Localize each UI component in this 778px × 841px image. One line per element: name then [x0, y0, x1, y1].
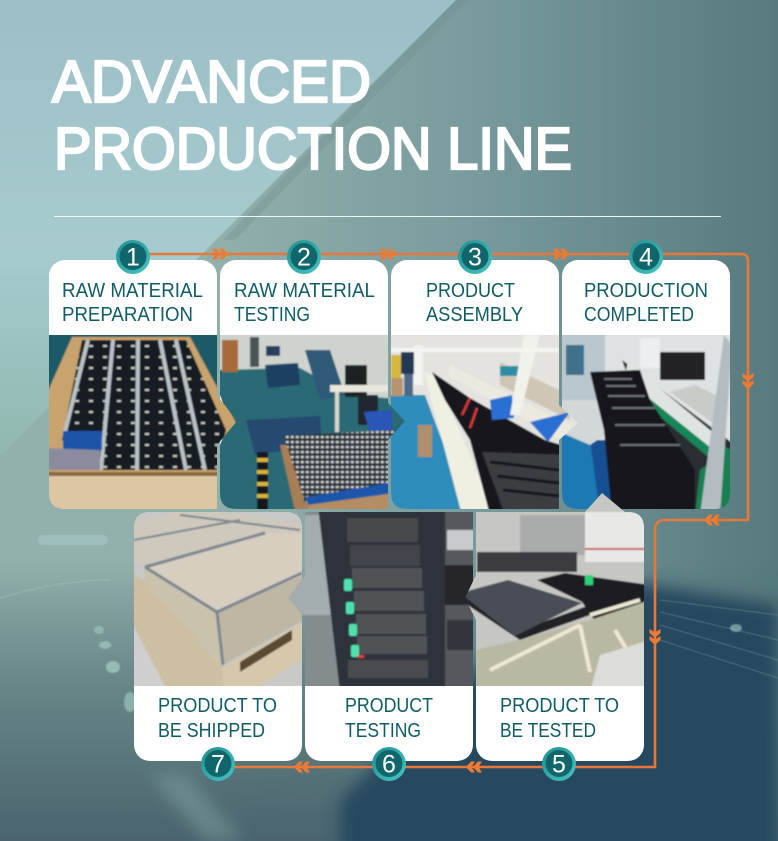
card 5: product to be tested [476, 512, 644, 761]
card 1: raw material preparation [49, 260, 217, 509]
photo: plywood crates [134, 512, 302, 686]
badge 5 [542, 747, 576, 781]
card 2: raw material testing: TESTING [234, 303, 310, 326]
divider line [54, 216, 721, 217]
photo: product assembly line [391, 335, 578, 509]
card 4: production completed [562, 260, 730, 509]
card 7: product to be shipped: PRODUCT TO [158, 694, 277, 717]
step badges [116, 240, 663, 781]
card 7: product to be shipped: BE SHIPPED [158, 719, 265, 742]
badge 7 [201, 747, 235, 781]
card 1: raw material preparation: PREPARATION [62, 303, 193, 326]
badge 4: 4 [639, 244, 653, 272]
photo: production completed line [562, 335, 730, 509]
card 4: production completed: PRODUCTION [584, 279, 708, 302]
title [52, 49, 572, 182]
card 4: production completed: COMPLETED [584, 303, 694, 326]
badge 4 [629, 240, 663, 274]
process flow connector [133, 248, 754, 772]
card 7: product to be shipped [134, 512, 302, 761]
card 3: product assembly [391, 260, 559, 509]
badge 3 [458, 240, 492, 274]
badge 3: 3 [468, 244, 482, 272]
badge 2 [287, 240, 321, 274]
card 5: product to be tested: BE TESTED [500, 719, 596, 742]
card 2: raw material testing: RAW MATERIAL [234, 279, 375, 302]
card 2: raw material testing [220, 260, 388, 509]
badge 2: 2 [297, 244, 311, 272]
badge 6: 6 [382, 750, 396, 778]
card 6: product testing [305, 512, 473, 761]
card 3: product assembly: ASSEMBLY [426, 303, 523, 326]
badge 1: 1 [126, 244, 140, 272]
badge 1 [116, 240, 150, 274]
photo: batteries on test trolleys [465, 493, 644, 686]
badge 6 [372, 747, 406, 781]
card 5: product to be tested: PRODUCT TO [500, 694, 619, 717]
photo: raw material cells in crate [49, 335, 237, 509]
card 1: raw material preparation: RAW MATERIAL [62, 279, 203, 302]
badge 5: 5 [552, 750, 566, 778]
card 3: product assembly: PRODUCT [426, 279, 515, 302]
title: ADVANCED [52, 49, 371, 115]
card 6: product testing: TESTING [345, 719, 421, 742]
badge 7: 7 [211, 750, 225, 778]
photo: battery test rack [288, 512, 473, 686]
title: PRODUCTION LINE [54, 116, 572, 182]
photo: raw material testing floor [220, 335, 405, 509]
card 6: product testing: PRODUCT [345, 694, 433, 717]
